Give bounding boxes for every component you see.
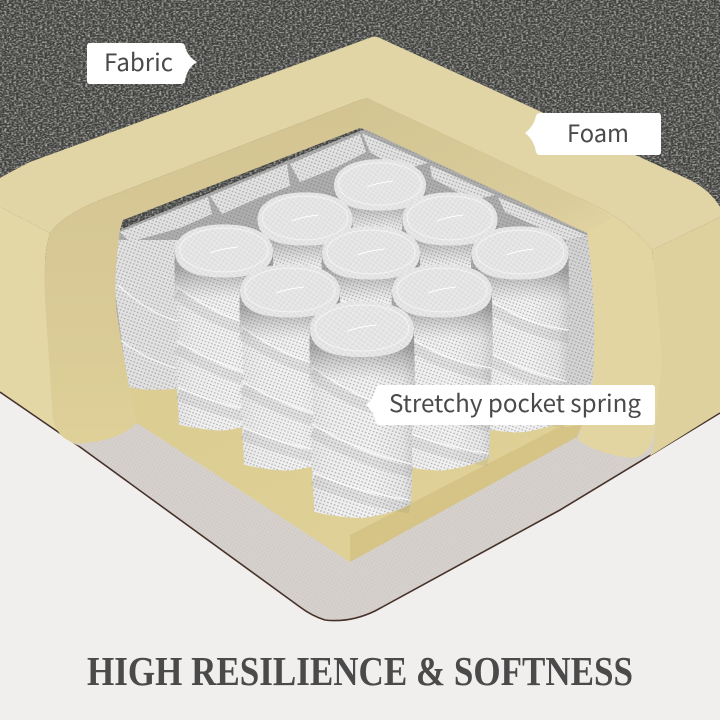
title: HIGH RESILIENCE & SOFTNESS [87, 648, 633, 694]
label: Fabric: Fabric [104, 43, 173, 78]
foam inner wall, left [44, 100, 360, 443]
label: Stretchy pocket spring: Stretchy pocket spring [389, 384, 641, 419]
linen base layer with brown edge [0, 340, 720, 621]
foam inner wall and cut face, right [360, 98, 662, 458]
back row of pocket springs [105, 128, 597, 390]
foam left side face [0, 207, 80, 446]
foam top face [0, 37, 720, 250]
dark grey upholstery fabric [0, 0, 720, 260]
label: Foam [525, 113, 661, 155]
label: Fabric [87, 43, 197, 84]
foam right side face [650, 217, 720, 456]
foam seat floor [105, 360, 595, 562]
pocket spring coils [175, 159, 569, 518]
label: Foam: Foam [567, 114, 629, 149]
